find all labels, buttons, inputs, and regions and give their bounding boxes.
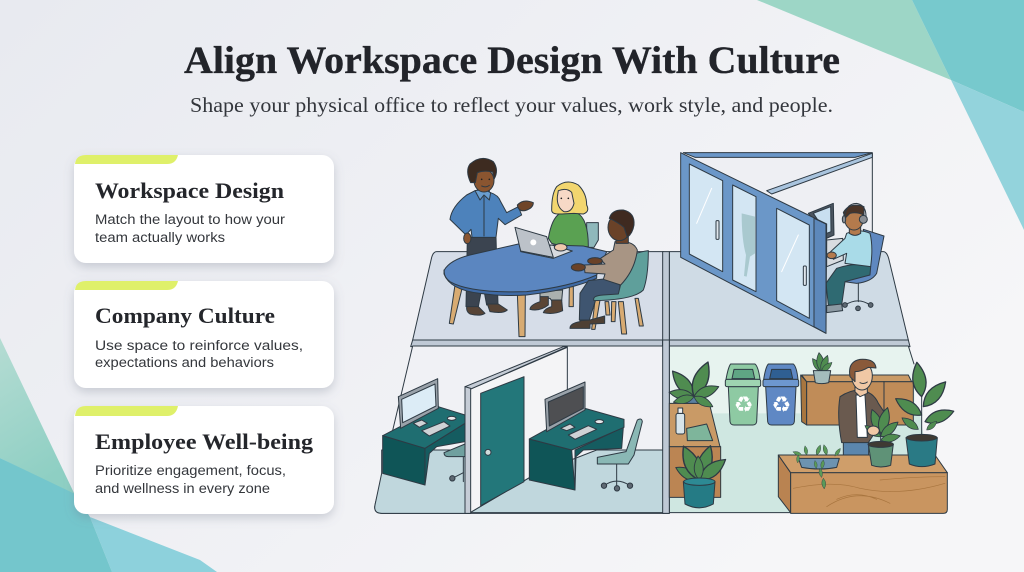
- plant being held: [863, 406, 901, 467]
- room: quiet focus booth: [663, 153, 910, 350]
- blonde woman: [530, 182, 598, 313]
- left wooden counter: [669, 403, 721, 497]
- small potted plant on cabinet: [810, 352, 834, 384]
- card: Workspace Design: Workspace Design: [95, 178, 285, 203]
- blue table: [444, 244, 607, 296]
- booth back walls: [683, 153, 872, 255]
- blue recycling bin: [763, 364, 799, 425]
- card: Workspace Design: team actually works: [95, 230, 225, 246]
- laptop: [515, 227, 572, 258]
- person with headphones: [826, 203, 884, 313]
- standing man: [450, 158, 533, 315]
- floor: [413, 252, 663, 340]
- trailing plant: [792, 444, 842, 489]
- card: Employee Well-being: [74, 406, 334, 514]
- horizontal floor divider: [411, 340, 663, 347]
- partition with teal door: [465, 347, 567, 513]
- card: Workspace Design: [74, 155, 334, 263]
- seated man and chair: [570, 210, 648, 334]
- subtitle: Shape your physical office to reflect your values, work style, and people.: [190, 93, 833, 117]
- wall: [375, 346, 663, 513]
- man tending plants: [839, 359, 888, 456]
- tall plant: [893, 361, 956, 467]
- green recycling bin: ♻: [734, 393, 754, 418]
- glass partition: [681, 153, 827, 333]
- green recycling bin: [725, 364, 761, 425]
- floor: [669, 252, 908, 340]
- card: Company Culture: expectations and behaviors: [95, 355, 274, 371]
- floor: [375, 450, 663, 513]
- left desk: [383, 379, 465, 485]
- title: Align Workspace Design With Culture: [184, 39, 840, 82]
- card: Company Culture: Company Culture: [95, 303, 275, 328]
- upper left plant: [668, 359, 721, 410]
- card: Company Culture: Use space to reinforce values,: [95, 338, 303, 354]
- room: collaborative meeting: [411, 158, 663, 347]
- vertical divider: [663, 340, 669, 513]
- right chair: [597, 419, 642, 491]
- computer monitor: [808, 203, 843, 267]
- floor dividers: [663, 252, 910, 350]
- room outline: [669, 346, 914, 513]
- blue recycling bin: ♻: [771, 393, 791, 418]
- room: private offices: [375, 340, 669, 513]
- card: Employee Well-being: and wellness in every zone: [95, 481, 270, 497]
- right desk: [529, 382, 624, 490]
- wooden cabinet: [801, 375, 913, 425]
- room: green wellness area: [663, 340, 956, 513]
- table legs: [449, 285, 573, 337]
- wall: [669, 346, 915, 423]
- floor plant: [673, 443, 729, 508]
- left divider: [663, 340, 669, 513]
- card: Workspace Design: Match the layout to how your: [95, 212, 285, 228]
- left chair: [444, 444, 465, 482]
- card: Employee Well-being: Prioritize engagement, focus,: [95, 463, 286, 479]
- floor: [669, 413, 927, 513]
- card: Employee Well-being: Employee Well-being: [95, 429, 314, 454]
- large wooden planter counter: [778, 455, 947, 513]
- card: Company Culture: [74, 281, 334, 388]
